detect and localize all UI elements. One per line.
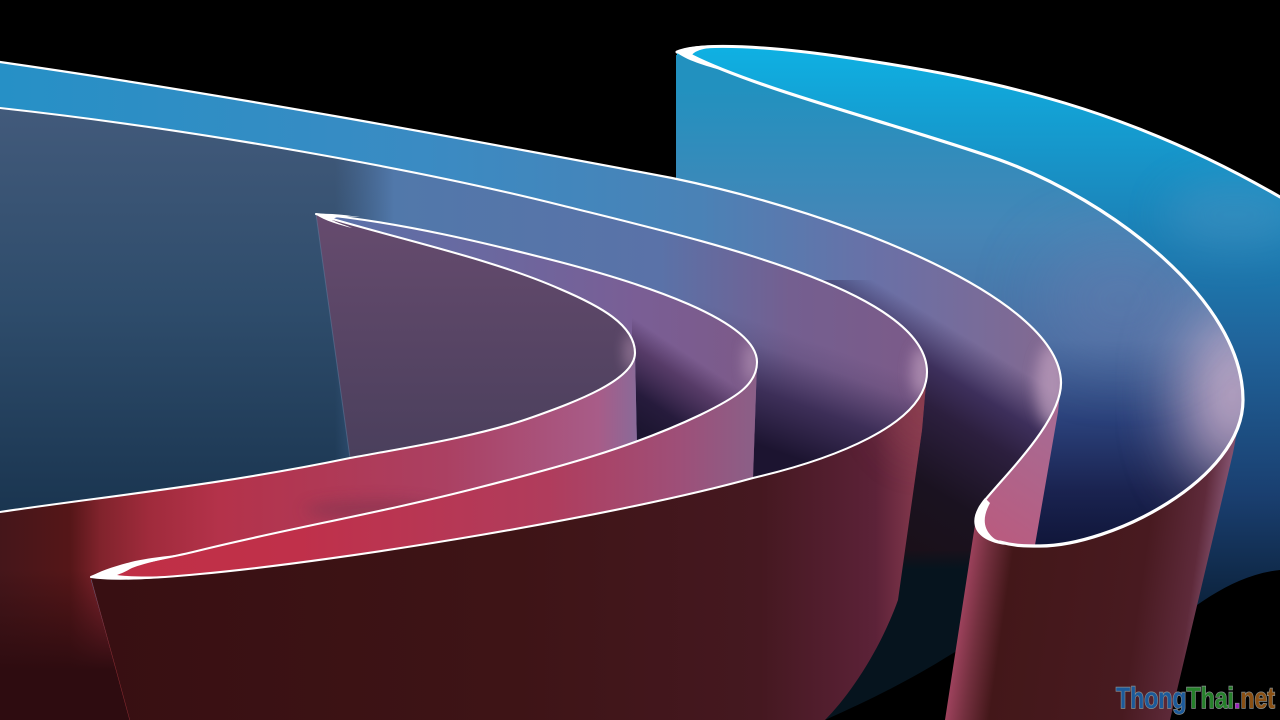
ribbon: long band from left edge (0, 62, 1080, 720)
white edge lines (0, 46, 1280, 579)
ribbon: upper right blue band (676, 48, 1280, 605)
ribbon tip: top right crescent (676, 45, 760, 71)
ribbon: inner wall behind S-curve (676, 55, 1277, 546)
ribbon: wedge face (316, 214, 639, 458)
ribbon: large navy face (0, 108, 935, 530)
ribbon: front maroon face (91, 386, 926, 720)
ribbon: pink S-curve fold (977, 383, 1061, 546)
ribbon tip: lower left crescent (90, 552, 193, 579)
white bend: S-curve thickening (974, 498, 1005, 545)
ribbon: front maroon pillar (945, 400, 1243, 720)
ribbon tip: wedge point (315, 214, 360, 228)
ribbon: narrow sliver behind wedge (316, 214, 760, 480)
ribbon: bright red strip (91, 362, 757, 579)
black area under the ribbon (825, 640, 975, 720)
ribbon: pink-red strip and lower left shadow (0, 353, 637, 720)
